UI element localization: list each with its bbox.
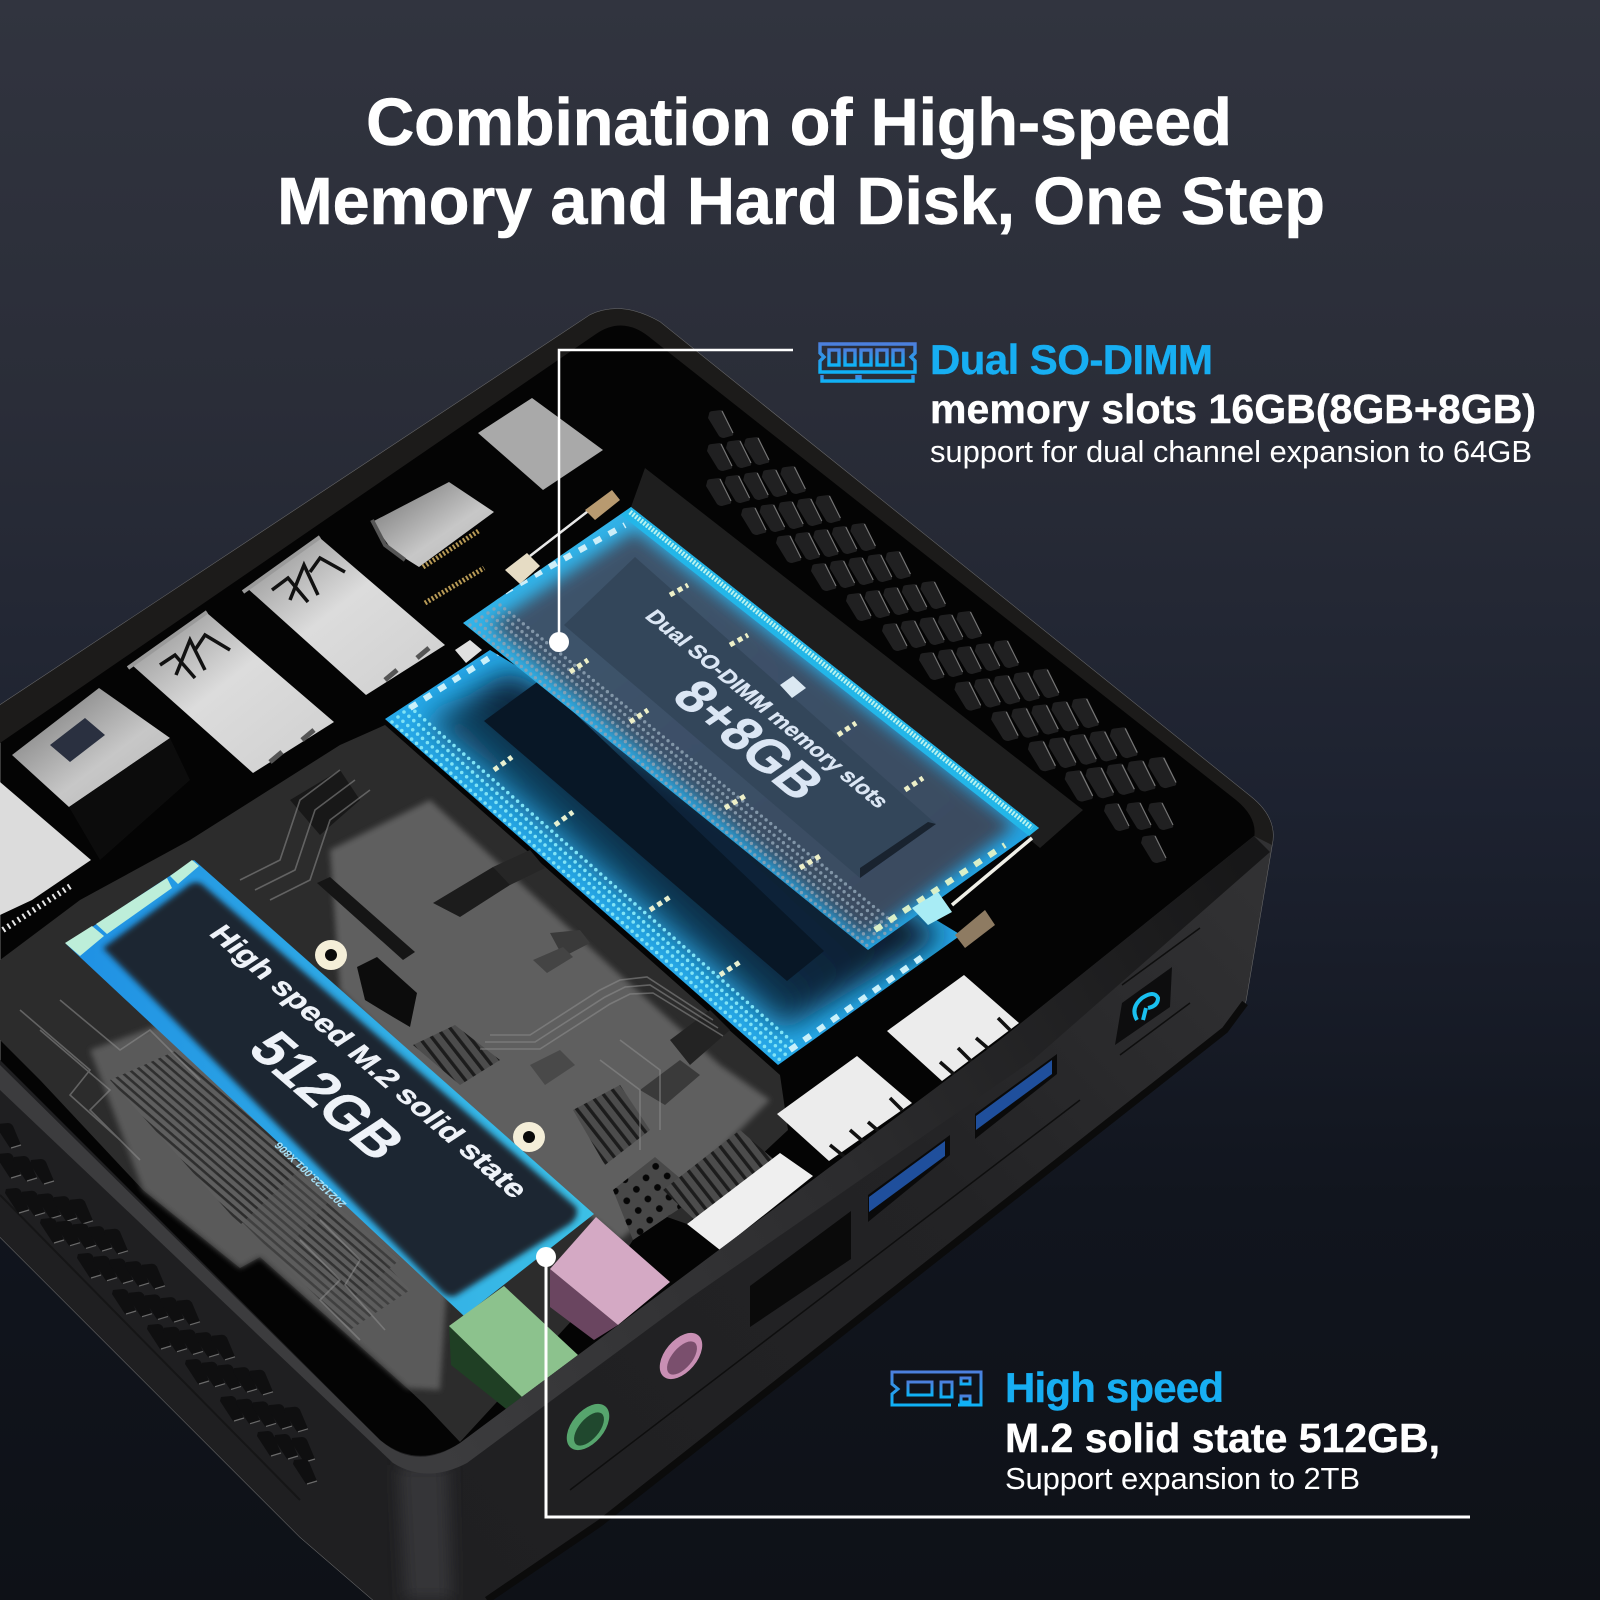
upper memory module — [463, 507, 1039, 950]
callout text: memory: Dual SO-DIMM — [930, 336, 1213, 383]
top vent grid — [706, 410, 1176, 863]
SSD label: High speed M.2 solid state — [202, 920, 535, 1204]
rear ports — [0, 398, 603, 930]
upper module chip — [564, 557, 936, 878]
callout text: SSD: Support expansion to 2TB — [1005, 1461, 1360, 1496]
memory right latch — [912, 838, 1032, 948]
corner highlight — [398, 1465, 452, 1600]
upper module dotted band — [470, 605, 900, 948]
callout text: SSD: High speed — [1005, 1364, 1224, 1411]
inner connector: white 2 — [777, 1056, 912, 1161]
lower body: front panel and side vent face — [0, 836, 1272, 1600]
front serial port — [750, 1211, 851, 1327]
callout line: SSD — [536, 1247, 1470, 1517]
memory chip label: 8+8GB — [660, 671, 837, 809]
SSD gold fingers — [65, 860, 199, 956]
SSD serial number: 2021523.001.X806 — [272, 1140, 349, 1209]
body rim band — [0, 836, 1270, 1474]
inner connector: white 1 — [887, 975, 1019, 1081]
memory slot bar — [631, 468, 1083, 848]
rear port: power jack — [478, 398, 603, 490]
lower module chip — [484, 680, 824, 981]
title: Combination of High-speed — [366, 85, 1232, 160]
icon: memory stick — [820, 344, 915, 381]
front inner connectors — [449, 975, 1019, 1412]
rear port: USB 2 — [243, 537, 445, 695]
memory chip label: Dual SO-DIMM memory slots — [640, 606, 895, 812]
front USB port 1 — [975, 1054, 1057, 1139]
SSD standoff 1 — [315, 940, 347, 970]
memory latch — [455, 490, 620, 663]
callout text: memory: support for dual channel expansion to 64GB — [930, 434, 1532, 469]
device body silhouette — [0, 309, 1273, 1600]
front USB port 2 — [868, 1135, 950, 1222]
memory gold finger edge — [621, 507, 1039, 836]
lower memory module — [385, 648, 961, 1065]
title — [277, 85, 1325, 239]
side vent holes — [0, 1123, 317, 1484]
front audio jack pink — [651, 1325, 711, 1387]
PCB board — [0, 725, 788, 1442]
SSD module — [65, 860, 594, 1316]
callout text: SSD: M.2 solid state 512GB, — [1005, 1415, 1440, 1461]
rear port: USB 1 — [128, 612, 334, 773]
callout text: SSD — [1005, 1364, 1440, 1496]
rear port: LAN — [12, 688, 190, 860]
rear port: HDMI — [0, 782, 91, 930]
inner connector: white 3 — [687, 1153, 813, 1250]
icon: M.2 SSD — [892, 1372, 987, 1405]
callout line: memory — [549, 350, 793, 652]
front audio jack green — [558, 1396, 618, 1458]
top rim — [0, 309, 1273, 845]
connector block on board — [357, 957, 417, 1027]
rear port: DisplayPort — [372, 482, 494, 603]
SSD label: 512GB — [235, 1022, 418, 1170]
title: Memory and Hard Disk, One Step — [277, 164, 1325, 239]
inner connector: green audio — [449, 1286, 578, 1412]
callout text: memory: memory slots 16GB(8GB+8GB) — [930, 386, 1536, 432]
SSD standoff 2 — [513, 1122, 545, 1152]
inner connector: pink audio — [550, 1217, 670, 1340]
callout text: memory — [930, 336, 1536, 469]
power button — [1115, 967, 1172, 1045]
mini PC device — [0, 309, 1273, 1600]
lower module dotted edge — [392, 707, 796, 1060]
